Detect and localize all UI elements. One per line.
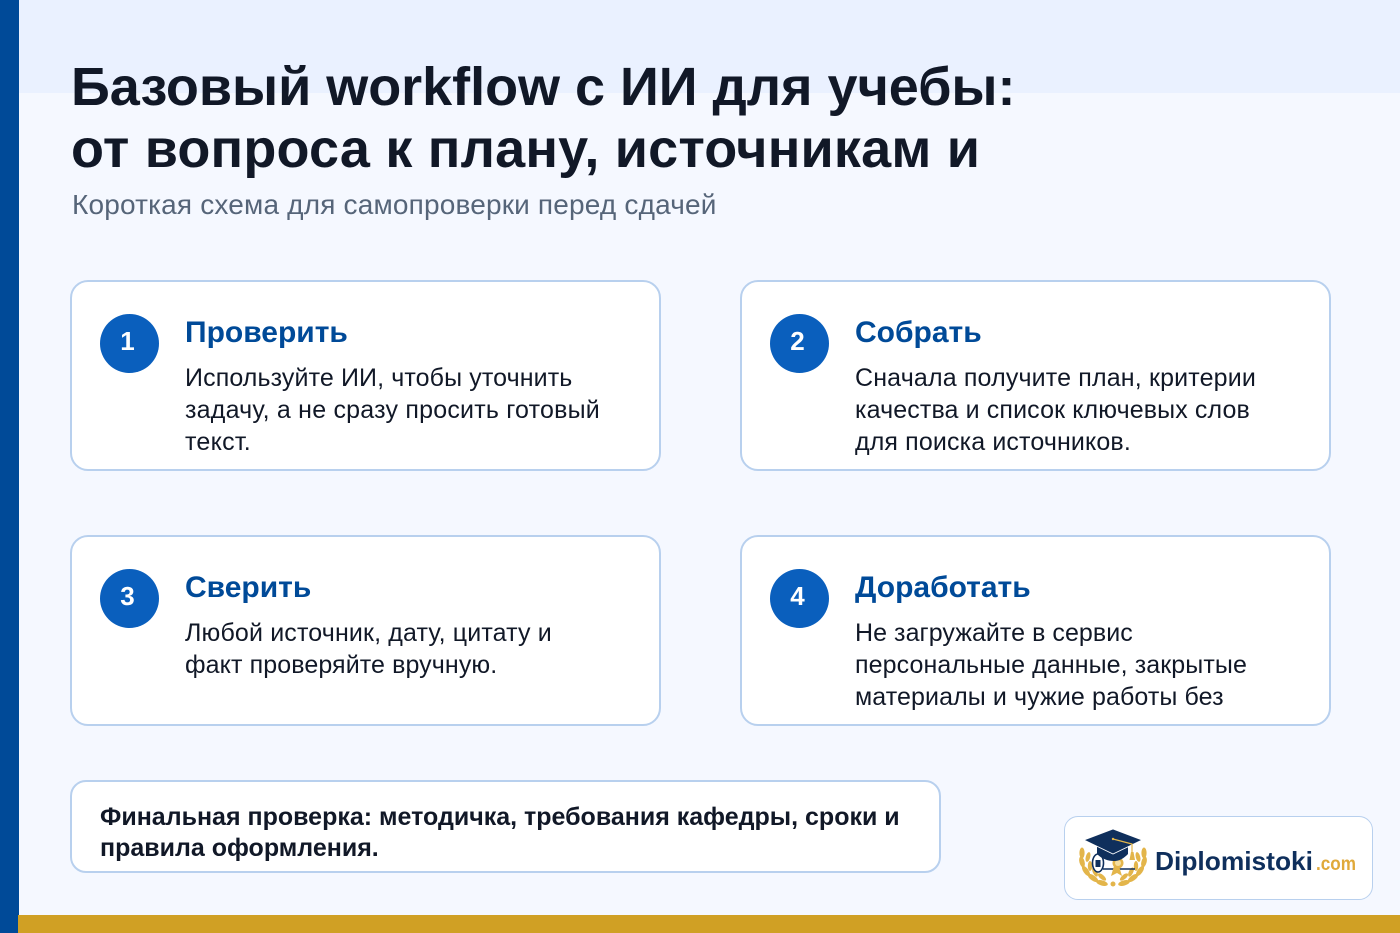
icon: laurel wreath left — [1078, 848, 1108, 887]
step 3 text: факт проверяйте вручную. — [185, 651, 497, 679]
step 3 heading: Сверить — [185, 571, 311, 604]
step 4 text — [855, 619, 1247, 711]
panel: step 1 — [70, 280, 661, 471]
step 1 number — [100, 314, 159, 373]
icon: graduation cap — [1084, 829, 1142, 861]
callout: final check: Финальная проверка: методичка, требования кафедры, сроки и — [100, 803, 900, 831]
callout: final check: правила оформления. — [100, 834, 379, 862]
logo domain: .com — [1316, 854, 1356, 875]
logo card — [1064, 816, 1373, 900]
step 1 text: задачу, а не сразу просить готовый — [185, 396, 600, 424]
step 3 text — [185, 619, 552, 679]
step 2 text: Сначала получите план, критерии — [855, 364, 1256, 392]
step 4 number: 4 — [790, 581, 805, 611]
title — [71, 57, 1015, 179]
step 3 number — [100, 569, 159, 628]
step 2 text — [855, 364, 1256, 456]
header band — [18, 0, 1400, 93]
title: Базовый workflow с ИИ для учебы: — [71, 57, 1015, 117]
step 1 number: 1 — [120, 326, 135, 356]
panel: step 4 — [740, 535, 1331, 726]
icon: diploma scroll — [1092, 854, 1135, 876]
step 1 text: Используйте ИИ, чтобы уточнить — [185, 364, 572, 392]
step 1 text: текст. — [185, 428, 251, 456]
step 4 text: персональные данные, закрытые — [855, 651, 1247, 679]
step 1 text — [185, 364, 600, 456]
subtitle: Короткая схема для самопроверки перед сдачей — [72, 189, 717, 220]
left accent bar — [0, 0, 19, 933]
step 2 number: 2 — [790, 326, 805, 356]
callout: final check — [70, 780, 941, 873]
title: от вопроса к плану, источникам и — [71, 119, 980, 179]
step 4 text: Не загружайте в сервис — [855, 619, 1133, 647]
step 2 text: качества и список ключевых слов — [855, 396, 1250, 424]
bottom gold bar — [18, 915, 1400, 933]
step 2 number — [770, 314, 829, 373]
icon: laurel wreath right — [1118, 848, 1148, 887]
step 3 text: Любой источник, дату, цитату и — [185, 619, 552, 647]
step 2 text: для поиска источников. — [855, 428, 1131, 456]
step 2 heading: Собрать — [855, 316, 982, 349]
step 4 number — [770, 569, 829, 628]
logo: graduation cap with laurel and wordmark — [1079, 830, 1356, 886]
step 4 heading: Доработать — [855, 571, 1031, 604]
step 4 text: материалы и чужие работы без — [855, 683, 1224, 711]
panel: step 3 — [70, 535, 661, 726]
icon: wreath dot — [1110, 882, 1116, 886]
step 1 heading: Проверить — [185, 316, 348, 349]
panel: step 2 — [740, 280, 1331, 471]
logo wordmark: Diplomistoki — [1155, 846, 1313, 876]
step 3 number: 3 — [120, 581, 135, 611]
